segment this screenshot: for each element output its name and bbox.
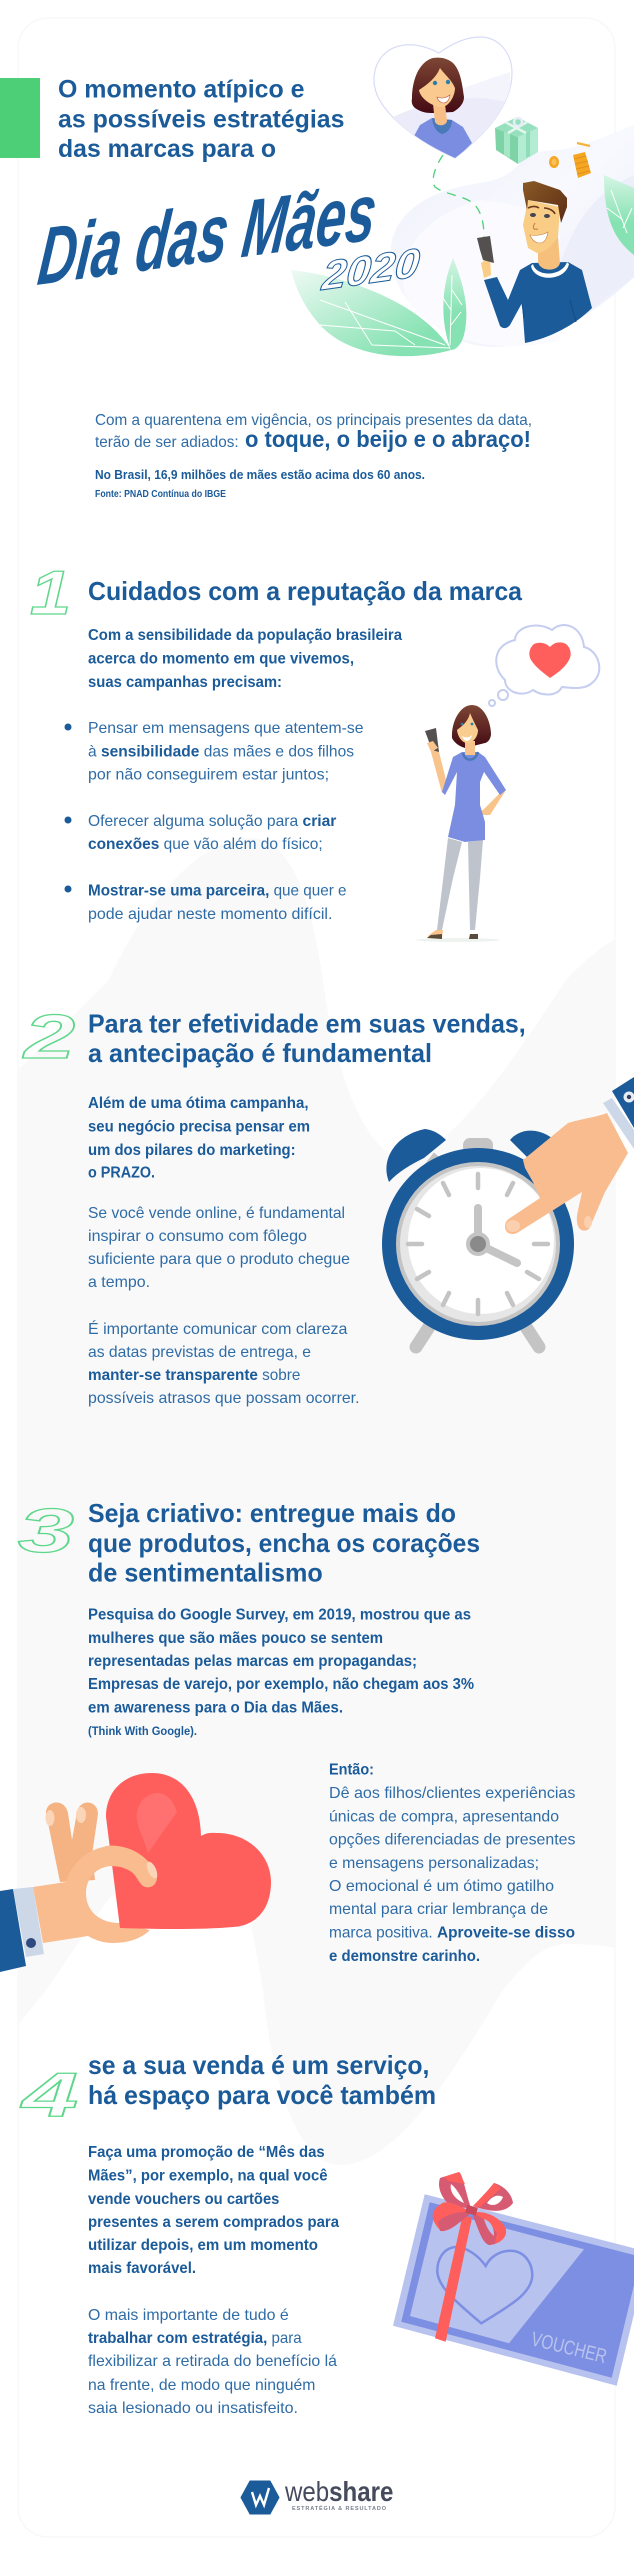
lead paragraph 3: mulheres que são mães pouco se sentem [88,1630,383,1647]
logo hexagon [241,2481,279,2514]
paragraph: Então: O emocional é um ótimo gatilho [329,1878,554,1895]
heading 3: que produtos, encha os corações [88,1528,480,1558]
lead paragraph 3: Pesquisa do Google Survey, em 2019, mostrou que as [88,1607,471,1624]
voucher card [393,2172,634,2386]
bullet list: Mostrar-se uma parceira, que quer e [88,882,347,900]
background swoosh [18,838,615,2165]
lead paragraph 4 [88,2144,339,2277]
section 4 [19,2050,634,2417]
lead paragraph 2: o PRAZO. [88,1165,155,1182]
heading 1: Cuidados com a reputação da marca [88,576,523,606]
hand pointing at clock [505,1077,634,1234]
lead paragraph 4: utilizar depois, em um momento [88,2237,318,2254]
paragraph: Então: mental para criar lembrança de [329,1901,548,1918]
number 4: 4 [19,2061,78,2130]
lead paragraph 3 [88,1607,474,1738]
coins [549,143,591,178]
bullet list: à sensibilidade das mães e dos filhos [88,744,354,761]
heading 3: Seja criativo: entregue mais do [88,1498,456,1528]
heading 3: de sentimentalismo [88,1557,323,1587]
number 2: 2 [23,1003,75,1072]
paragraph: Então: Então: [329,1762,374,1779]
body paragraph 2b: manter-se transparente sobre [88,1367,300,1384]
lead paragraph 1 [88,627,402,691]
paragraph: Então: e demonstre carinho. [329,1948,480,1965]
section 1 [30,559,599,942]
paragraph: Então: e mensagens personalizadas; [329,1855,539,1872]
body paragraph 2a [88,1205,350,1291]
logo tagline: ESTRATÉGIA & RESULTADO [292,2504,387,2512]
body paragraph 2b: É importante comunicar com clareza [88,1319,348,1338]
lead paragraph 3: em awareness para o Dia das Mães. [88,1700,343,1716]
bullet list: por não conseguirem estar juntos; [88,766,329,784]
lead paragraph 1: acerca do momento em que vivemos, [88,651,354,668]
number 3: 3 [18,1497,74,1566]
lead paragraph 2: seu negócio precisa pensar em [88,1119,310,1136]
paragraph: Então: marca positiva. Aproveite-se disso [329,1924,575,1942]
bullet list: pode ajudar neste momento difícil. [88,906,332,923]
lead paragraph 3: Empresas de varejo, por exemplo, não chegam aos 3% [88,1676,474,1693]
header illustration [291,37,634,356]
lead paragraph 3: representadas pelas marcas em propagandas; [88,1653,417,1670]
intro text: o toque, o beijo e o abraço! [245,426,531,452]
upright leaf [441,258,466,350]
dashed route [433,155,484,237]
lead paragraph 2: um dos pilares do marketing: [88,1142,296,1159]
script title: Dia das Mães: Dia das Mães [34,166,381,303]
lead paragraph 4: Mães”, por exemplo, na qual você [88,2168,328,2184]
bullet list: conexões que vão além do físico; [88,836,323,853]
paragraph: Então: únicas de compra, apresentando [329,1808,559,1825]
paragraph: Então: opções diferenciadas de presentes [329,1832,575,1849]
son [477,181,592,343]
lead paragraph 4: mais favorável. [88,2260,196,2277]
body paragraph 2a: suficiente para que o produto chegue [88,1251,350,1268]
body paragraph 2b: as datas previstas de entrega, e [88,1344,311,1361]
body paragraph 2a: a tempo. [88,1274,150,1291]
section 2 [23,1003,634,1407]
header green tab [0,78,40,158]
heading 4: há espaço para você também [88,2080,436,2110]
body paragraph 2b [88,1319,360,1407]
heart frame with mother [374,37,512,165]
big leaf [291,270,451,356]
right leaf [604,175,634,255]
intro text: Fonte: PNAD Contínua do IBGE [95,488,226,500]
lead paragraph 1: Com a sensibilidade da população brasileira [88,627,402,644]
thought cloud with heart [489,625,599,706]
bullet list: Oferecer alguma solução para criar [88,813,336,830]
body paragraph 4: trabalhar com estratégia, para [88,2330,302,2347]
lead paragraph 4: presentes a serem comprados para [88,2214,339,2231]
section 3 [0,1497,575,1972]
body paragraph 4: saia lesionado ou insatisfeito. [88,2400,298,2417]
voucher label: VOUCHER [529,2328,609,2368]
heading 2 [88,1009,526,1068]
intro text [95,412,532,500]
lead paragraph 3: (Think With Google). [88,1726,197,1738]
intro text: terão de ser adiados: [95,434,239,451]
lead paragraph 4: Faça uma promoção de “Mês das [88,2144,325,2161]
voucher heart [437,2247,532,2323]
alarm clock [382,1129,574,1347]
logo wordmark: webshare [284,2476,393,2507]
body paragraph 4: na frente, de modo que ninguém [88,2377,315,2394]
heading 3 [88,1498,480,1587]
intro text: No Brasil, 16,9 milhões de mães estão acima dos 60 anos. [95,467,425,482]
woman with phone [416,705,506,942]
heading 4: se a sua venda é um serviço, [88,2050,429,2080]
paragraph: Então [329,1762,575,1965]
intro text: Com a quarentena em vigência, os principais presentes da data, [95,412,532,429]
number 1: 1 [30,559,71,628]
heading 2: Para ter efetividade em suas vendas, [88,1009,526,1039]
title: das marcas para o [58,135,276,163]
lead paragraph 4: vende vouchers ou cartões [88,2191,279,2208]
title: O momento atípico e [58,76,305,104]
heading 4 [88,2050,436,2110]
hand holding heart [0,1773,271,1972]
webshare logo [241,2476,393,2514]
body paragraph 4: flexibilizar a retirada do benefício lá [88,2353,337,2370]
body paragraph 2b: possíveis atrasos que possam ocorrer. [88,1390,360,1407]
paragraph: Então: Dê aos filhos/clientes experiências [329,1785,575,1802]
title: as possíveis estratégias [58,106,344,134]
gift box [495,117,538,164]
heading 2: a antecipação é fundamental [88,1038,432,1068]
body paragraph 2a: inspirar o consumo com fôlego [88,1228,307,1245]
lead paragraph 1: suas campanhas precisam: [88,674,282,691]
body paragraph 4 [88,2307,337,2417]
lead paragraph 2: Além de uma ótima campanha, [88,1095,308,1112]
body paragraph 4: O mais importante de tudo é [88,2307,289,2324]
lead paragraph 2 [88,1095,310,1182]
ribbon [433,2172,513,2342]
lilac blob [391,125,634,347]
script year: 2020: 2020 [319,239,422,299]
bullet list [64,720,364,923]
title [58,76,344,163]
bullet list: Pensar em mensagens que atentem-se [88,720,364,737]
body paragraph 2a: Se você vende online, é fundamental [88,1205,345,1222]
